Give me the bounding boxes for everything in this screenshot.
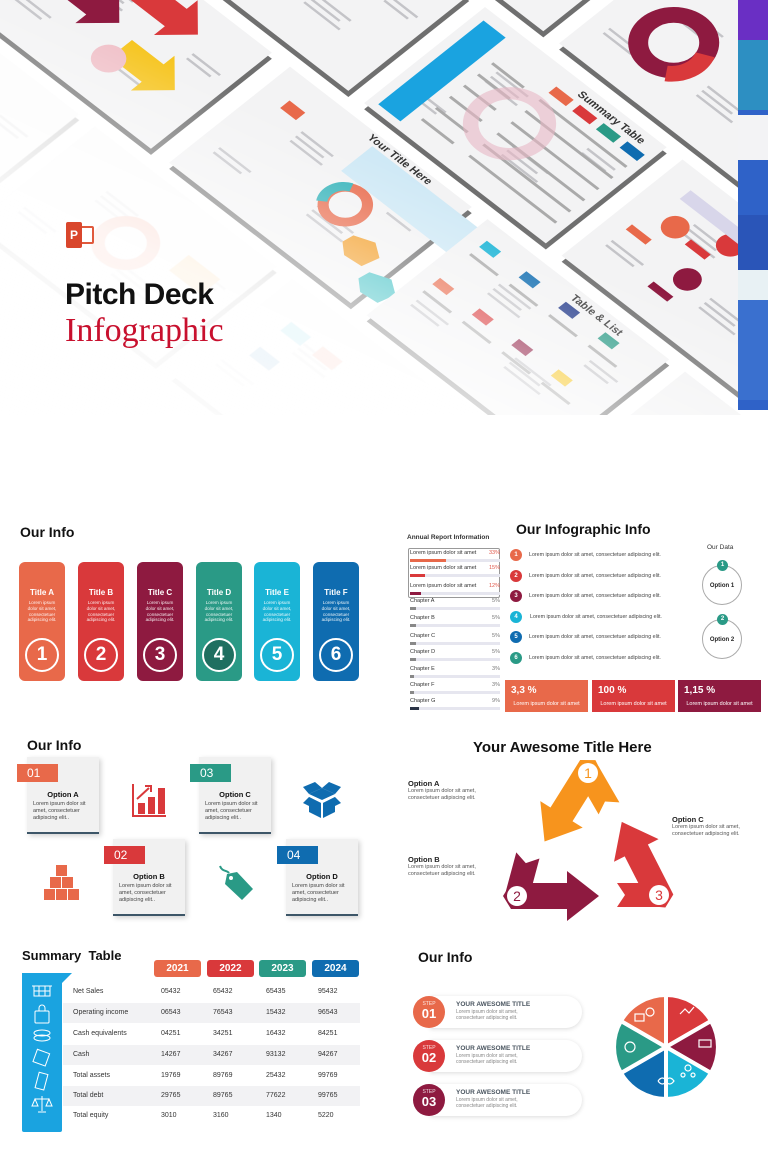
- table rows: 96543: [318, 1009, 337, 1016]
- panel: six title cards: dolor sit amet,: [205, 606, 233, 611]
- row -1: [358, 0, 668, 37]
- hero: isometric slides collage: Table & List: [567, 293, 626, 338]
- panel: six title cards: consectetuer: [206, 612, 232, 617]
- panel: six title cards: consectetuer: [88, 612, 114, 617]
- panel: option cards: 02: [114, 848, 127, 862]
- text: 5%: [492, 649, 500, 655]
- chart: aperture wheel: [616, 997, 716, 1097]
- year tabs: [154, 960, 359, 977]
- table rows: 25432: [266, 1072, 285, 1079]
- list: steps: consectetuer adipiscing elit.: [456, 1103, 517, 1109]
- panel: six title cards: Title B: [89, 588, 113, 597]
- list: numbered items: 6: [514, 655, 518, 661]
- list: steps: YOUR AWESOME TITLE: [456, 1045, 530, 1052]
- panel: option cards: [17, 756, 362, 920]
- table rows: 3010: [161, 1112, 177, 1119]
- panel: option cards: Lorem ipsum dolor sit: [33, 801, 86, 807]
- arrow 2: 2: [513, 888, 521, 904]
- box: highlighted rows: [408, 548, 500, 598]
- row 0: [163, 0, 473, 97]
- panel: option cards: amet, consectetuer: [119, 890, 166, 896]
- panel: six title cards: 3: [155, 644, 165, 665]
- list: steps: consectetuer adipiscing elit.: [456, 1059, 517, 1065]
- table rows: Total debt: [73, 1092, 103, 1099]
- heading: annual report: Annual Report Information: [407, 534, 489, 541]
- text: Chapter A: [410, 598, 434, 604]
- panel: six title cards: consectetuer: [323, 612, 349, 617]
- list: numbered items: Lorem ipsum dolor sit amet, consectetuer adipiscing elit.: [530, 614, 662, 620]
- panel: six title cards: dolor sit amet,: [87, 606, 115, 611]
- table rows: 16432: [266, 1030, 285, 1037]
- table rows: [63, 988, 360, 1119]
- panel: Our Data options: 2: [721, 616, 724, 622]
- panel: six title cards: consectetuer: [29, 612, 55, 617]
- year tabs: 2022: [219, 963, 242, 974]
- panel: six title cards: adipiscing elit.: [28, 617, 56, 622]
- list: steps: consectetuer adipiscing elit.: [456, 1015, 517, 1021]
- panel: six title cards: Title C: [148, 588, 172, 597]
- list: steps: YOUR AWESOME TITLE: [456, 1001, 530, 1008]
- panel: six title cards: adipiscing elit.: [146, 617, 174, 622]
- panel: six title cards: dolor sit amet,: [146, 606, 174, 611]
- table rows: Cash equivalents: [73, 1030, 127, 1037]
- list: steps: 02: [422, 1050, 436, 1065]
- stat boxes: 100 %: [598, 685, 626, 696]
- text: option A: Option A: [408, 779, 439, 788]
- row 1: [0, 0, 276, 155]
- text: 12%: [489, 583, 500, 589]
- table rows: 76543: [213, 1009, 232, 1016]
- panel: annual report: [407, 534, 500, 598]
- panel: option cards: Lorem ipsum dolor sit: [292, 883, 345, 889]
- text: 5%: [492, 598, 500, 604]
- table rows: 1340: [266, 1112, 282, 1119]
- panel: option cards: Lorem ipsum dolor sit: [119, 883, 172, 889]
- text: Lorem ipsum dolor sit amet: [410, 565, 476, 571]
- text: option C: Lorem ipsum dolor sit amet,: [672, 824, 740, 830]
- text: Lorem ipsum dolor sit amet: [410, 583, 476, 589]
- table rows: 15432: [266, 1009, 285, 1016]
- list: numbered items: Lorem ipsum dolor sit amet, consectetuer adipiscing elit.: [529, 573, 661, 579]
- panel: option cards: amet, consectetuer: [33, 808, 80, 814]
- panel: option cards: Lorem ipsum dolor sit: [205, 801, 258, 807]
- heading: Your Awesome Title Here: Your Awesome Title Here: [473, 739, 652, 756]
- list: steps: [413, 996, 584, 1118]
- text: Chapter B: [410, 615, 435, 621]
- table rows: 89765: [213, 1092, 232, 1099]
- panel: option cards: Option C: [219, 790, 251, 799]
- text: 5%: [492, 615, 500, 621]
- text: Chapter F: [410, 682, 434, 688]
- table rows: Operating income: [73, 1009, 128, 1016]
- text: option C: consectetuer adipiscing elit.: [672, 830, 740, 836]
- text: option C: [672, 815, 740, 836]
- list: numbered items: Lorem ipsum dolor sit amet, consectetuer adipiscing elit.: [529, 593, 661, 599]
- list: steps: Lorem ipsum dolor sit amet,: [456, 1009, 518, 1015]
- table rows: 19769: [161, 1072, 180, 1079]
- arrow 3: 3: [655, 887, 663, 903]
- list: steps: STEP: [422, 1045, 436, 1051]
- panel: option cards: amet, consectetuer: [292, 890, 339, 896]
- list: steps: Lorem ipsum dolor sit amet,: [456, 1097, 518, 1103]
- table rows: 05432: [161, 988, 180, 995]
- panel: six title cards: adipiscing elit.: [205, 617, 233, 622]
- text: option A: Lorem ipsum dolor sit amet,: [408, 788, 476, 794]
- panel: six title cards: 4: [214, 644, 224, 665]
- table rows: 99765: [318, 1092, 337, 1099]
- stat boxes: [505, 680, 761, 712]
- panel: Our Data options: 1: [721, 562, 724, 568]
- list: numbered items: 4: [514, 614, 518, 620]
- panel: six title cards: consectetuer: [264, 612, 290, 617]
- panel: option cards: 04: [287, 848, 300, 862]
- hero: isometric slides collage: Your Title Here: [364, 133, 435, 187]
- table rows: 93132: [266, 1051, 285, 1058]
- panel: six title cards: 2: [96, 644, 106, 665]
- stat boxes: 3,3 %: [511, 685, 537, 696]
- text: 3%: [492, 666, 500, 672]
- table rows: Total assets: [73, 1072, 110, 1079]
- icon: powerpoint: P: [70, 228, 78, 242]
- text: 15%: [489, 565, 500, 571]
- table rows: 06543: [161, 1009, 180, 1016]
- panel: six title cards: Title F: [324, 588, 348, 597]
- list: steps: 03: [422, 1094, 436, 1109]
- panel: option cards: Option D: [306, 872, 338, 881]
- table rows: 04251: [161, 1030, 180, 1037]
- title: Pitch Deck: Pitch Deck: [65, 278, 213, 311]
- year tabs: 2023: [271, 963, 294, 974]
- text: 3%: [492, 682, 500, 688]
- panel: six title cards: [19, 562, 359, 681]
- panel: Our Data options: Our Data: [707, 544, 733, 551]
- list: steps: STEP: [422, 1001, 436, 1007]
- panel: option cards: adipiscing elit..: [119, 897, 155, 903]
- table rows: Net Sales: [73, 988, 103, 995]
- panel: six title cards: dolor sit amet,: [322, 606, 350, 611]
- table rows: 77622: [266, 1092, 285, 1099]
- text: Chapter C: [410, 633, 435, 639]
- stat boxes: 1,15 %: [684, 685, 715, 696]
- text: Chapter D: [410, 649, 435, 655]
- list: numbered items: Lorem ipsum dolor sit amet, consectetuer adipiscing elit.: [529, 552, 661, 558]
- table rows: 95432: [318, 988, 337, 995]
- heading: Our Info 2: Our Info: [27, 737, 81, 753]
- list: numbered items: 1: [514, 552, 518, 558]
- list: numbered items: 3: [514, 593, 518, 599]
- text: option B: Lorem ipsum dolor sit amet,: [408, 864, 476, 870]
- table rows: 34267: [213, 1051, 232, 1058]
- panel: six title cards: 1: [37, 644, 47, 665]
- panel: Our Data options: [702, 544, 742, 659]
- table rows: 5220: [318, 1112, 334, 1119]
- text: Chapter E: [410, 666, 435, 672]
- panel: option cards: Option B: [133, 872, 165, 881]
- panel: six title cards: dolor sit amet,: [28, 606, 56, 611]
- table rows: Cash: [73, 1051, 89, 1058]
- heading: Our Info 1: Our Info: [20, 524, 74, 540]
- panel: six title cards: Title A: [30, 588, 54, 597]
- stat boxes: Lorem ipsum dolor sit amet: [513, 701, 580, 707]
- panel: six title cards: Lorem ipsum: [206, 600, 232, 605]
- arrow 2: [503, 852, 599, 921]
- arrow 1: [523, 747, 619, 855]
- table rows: 84251: [318, 1030, 337, 1037]
- icon: price tag: [219, 866, 253, 900]
- panel: six title cards: 6: [331, 644, 341, 665]
- text: 5%: [492, 633, 500, 639]
- table rows: 65432: [213, 988, 232, 995]
- text: Chapter G: [410, 698, 435, 704]
- list: numbered items: Lorem ipsum dolor sit amet, consectetuer adipiscing elit.: [529, 655, 661, 661]
- chart: cycle arrows: [503, 760, 674, 921]
- title: Infographic: Infographic: [65, 312, 224, 349]
- list: steps: Lorem ipsum dolor sit amet,: [456, 1053, 518, 1059]
- text: option B: Option B: [408, 855, 440, 864]
- text: option B: consectetuer adipiscing elit.: [408, 870, 476, 876]
- stat boxes: Lorem ipsum dolor sit amet: [686, 701, 753, 707]
- table rows: 65435: [266, 988, 285, 995]
- panel: six title cards: Lorem ipsum: [147, 600, 173, 605]
- year tabs: 2024: [324, 963, 347, 974]
- table rows: 34251: [213, 1030, 232, 1037]
- icon: stacked boxes: [44, 865, 79, 900]
- panel: six title cards: adipiscing elit.: [322, 617, 350, 622]
- side bar with icons: [22, 973, 72, 1132]
- list: numbered items: 5: [514, 634, 518, 640]
- panel: option cards: amet, consectetuer: [205, 808, 252, 814]
- list: steps: YOUR AWESOME TITLE: [456, 1089, 530, 1096]
- year tabs: 2021: [166, 963, 189, 974]
- panel: six title cards: Title E: [265, 588, 289, 597]
- panel: option cards: 01: [27, 766, 40, 780]
- panel: option cards: adipiscing elit..: [205, 815, 241, 821]
- slide titles: Summary Table: [574, 89, 648, 146]
- heading: Our Info 3: Our Info: [418, 949, 472, 965]
- panel: option cards: 03: [200, 766, 213, 780]
- table rows: 94267: [318, 1051, 337, 1058]
- list: steps: 01: [422, 1006, 436, 1021]
- panel: six title cards: adipiscing elit.: [263, 617, 291, 622]
- table rows: 99769: [318, 1072, 337, 1079]
- list: numbered items: 2: [514, 573, 518, 579]
- panel: six title cards: Lorem ipsum: [88, 600, 114, 605]
- icon: powerpoint: [19, 222, 708, 1097]
- text: option C: Option C: [672, 815, 704, 824]
- text: 33%: [489, 550, 500, 556]
- icon: open box: [303, 782, 341, 818]
- panel: six title cards: consectetuer: [147, 612, 173, 617]
- text: Lorem ipsum dolor sit amet: [410, 550, 476, 556]
- panel: option cards: adipiscing elit..: [292, 897, 328, 903]
- heading: Our Infographic Info: Our Infographic Info: [516, 521, 651, 537]
- hero: isometric slides collage: [0, 0, 768, 415]
- table rows: 3160: [213, 1112, 229, 1119]
- right strip: dark slides: [738, 0, 768, 410]
- list: steps: STEP: [422, 1089, 436, 1095]
- text: option B: [408, 855, 476, 876]
- arrow 3: [599, 811, 688, 919]
- text: option A: [408, 779, 476, 800]
- table rows: 29765: [161, 1092, 180, 1099]
- list: numbered items: [510, 549, 662, 664]
- table rows: 14267: [161, 1051, 180, 1058]
- arrow 1: 1: [584, 765, 592, 781]
- icon: bar chart: [132, 784, 166, 817]
- list: numbered items: Lorem ipsum dolor sit amet, consectetuer adipiscing elit.: [529, 634, 661, 640]
- panel: six title cards: Lorem ipsum: [264, 600, 290, 605]
- table rows: Total equity: [73, 1112, 108, 1119]
- panel: six title cards: adipiscing elit.: [87, 617, 115, 622]
- table rows: 89769: [213, 1072, 232, 1079]
- panel: Our Data options: Option 1: [710, 583, 734, 589]
- panel: six title cards: 5: [272, 644, 282, 665]
- panel: Our Data options: Option 2: [710, 637, 734, 643]
- panel: six title cards: Lorem ipsum: [323, 600, 349, 605]
- stat boxes: Lorem ipsum dolor sit amet: [600, 701, 667, 707]
- heading: Summary Table: Summary Table: [22, 948, 121, 963]
- panel: six title cards: dolor sit amet,: [263, 606, 291, 611]
- panel: six title cards: Lorem ipsum: [29, 600, 55, 605]
- faded far slides: [0, 0, 768, 674]
- panel: six title cards: Title D: [207, 588, 231, 597]
- panel: option cards: Option A: [47, 790, 79, 799]
- text: option A: consectetuer adipiscing elit.: [408, 794, 476, 800]
- text: 9%: [492, 698, 500, 704]
- panel: option cards: adipiscing elit..: [33, 815, 69, 821]
